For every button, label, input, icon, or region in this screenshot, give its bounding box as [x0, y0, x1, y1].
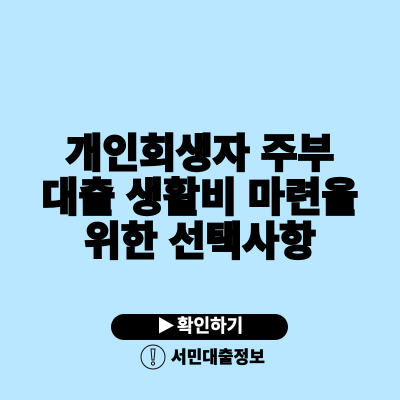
title	[42, 132, 358, 264]
title: 위한 선택사항	[84, 220, 316, 264]
title: 개인회생자 주부	[66, 132, 334, 176]
title: 대출 생활비 마련을	[42, 176, 358, 220]
button: 확인하기	[111, 314, 288, 340]
brand name: 서민대출정보	[171, 348, 265, 367]
icon: exclamation in circle	[140, 344, 166, 370]
brand: 서민대출정보	[140, 344, 265, 370]
button label: 확인하기	[177, 316, 243, 336]
icon: play arrow	[159, 317, 174, 334]
